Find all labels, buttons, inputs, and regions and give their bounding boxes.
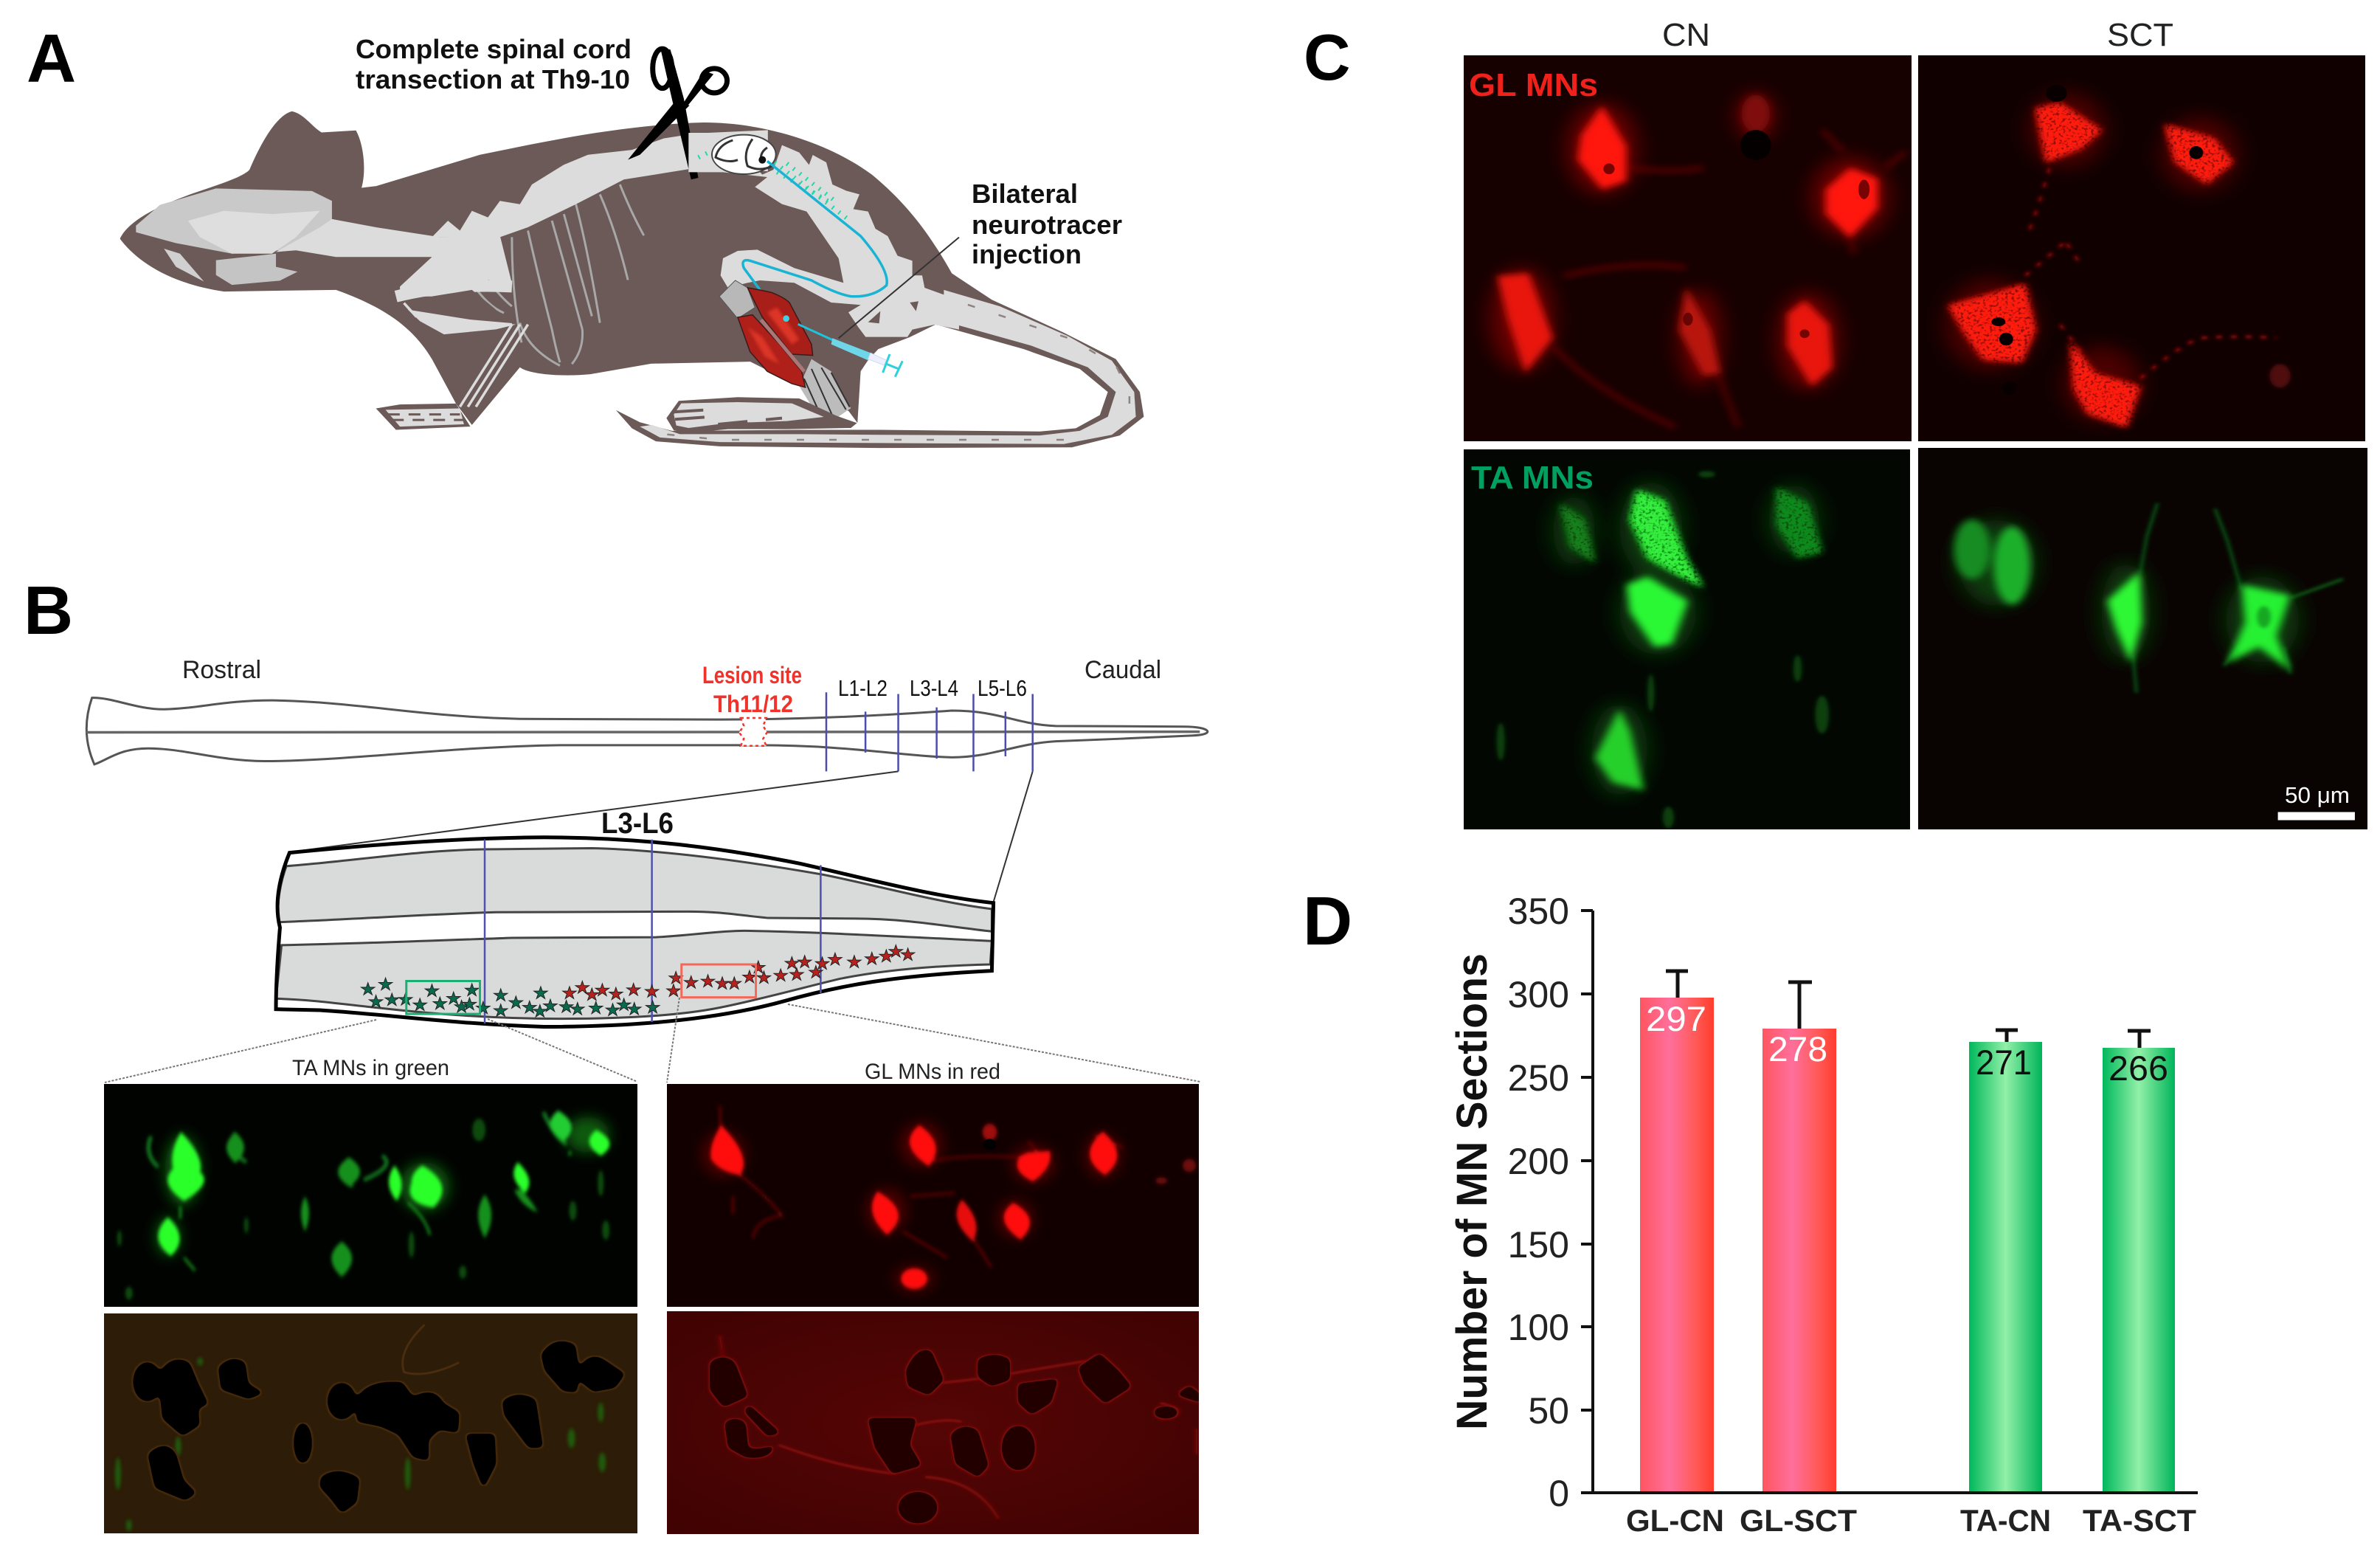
x axis labels: GL-CN bbox=[1626, 1503, 1724, 1538]
y tick labels: 150 bbox=[1508, 1224, 1569, 1265]
label GL MNs: GL MNs bbox=[1469, 67, 1598, 103]
bar GL-SCT bbox=[1762, 982, 1836, 1493]
TA heading: TA MNs in green bbox=[292, 1056, 449, 1080]
tail bbox=[616, 274, 1144, 448]
foreleg bbox=[404, 303, 528, 407]
x axis labels: GL-SCT bbox=[1740, 1503, 1857, 1538]
lesion label bbox=[702, 662, 802, 717]
y tick labels bbox=[1508, 891, 1569, 1514]
TA motor neuron stars bbox=[362, 978, 660, 1017]
scissor blades bbox=[628, 49, 713, 179]
lesion label: Th11/12 bbox=[713, 691, 793, 717]
segment labels: L1-L2 bbox=[838, 675, 888, 701]
zoom connector lines bbox=[288, 771, 1033, 902]
y tick labels: 200 bbox=[1508, 1141, 1569, 1182]
micrograph: TA MNs green channel bbox=[104, 1084, 637, 1307]
green region box bbox=[407, 981, 480, 1014]
bilateral injection leader bbox=[839, 238, 959, 338]
y tick labels: 100 bbox=[1508, 1307, 1569, 1348]
nerve bbox=[743, 161, 887, 315]
x axis labels bbox=[1626, 1503, 2196, 1538]
segment lines bbox=[485, 840, 820, 1023]
segment labels: L5-L6 bbox=[978, 675, 1027, 701]
bar GL-CN bbox=[1640, 971, 1714, 1493]
micrograph: GL MNs red channel bbox=[667, 1084, 1199, 1307]
hind foot bbox=[666, 397, 857, 433]
scale bar label: 50 μm bbox=[2285, 782, 2350, 808]
injection label: injection bbox=[972, 239, 1082, 269]
caudal label: Caudal bbox=[1085, 656, 1161, 684]
y tick labels: 300 bbox=[1508, 974, 1569, 1015]
segment lines bbox=[826, 692, 1033, 771]
panel B: spinal cord schematics bbox=[86, 656, 1208, 1534]
transection label: Complete spinal cord bbox=[356, 34, 632, 64]
panel label A: A bbox=[27, 20, 76, 97]
panel label C: C bbox=[1304, 21, 1351, 94]
lesion site bbox=[739, 718, 767, 746]
lower gray matter bbox=[276, 930, 992, 1019]
upper gray matter bbox=[278, 849, 992, 931]
spine bbox=[432, 130, 768, 237]
bar TA-SCT bbox=[2103, 1031, 2175, 1493]
GL heading: GL MNs in red bbox=[865, 1060, 1000, 1084]
axes and ticks bbox=[1581, 911, 2198, 1493]
micrograph: GL CN bbox=[1464, 55, 1912, 441]
micrograph: GL SCT bbox=[1918, 55, 2365, 441]
scissor handles bbox=[653, 49, 672, 89]
bar TA-CN bbox=[1969, 1030, 2042, 1493]
panel A: rat schematic bbox=[120, 34, 1144, 448]
rat body and skeleton bbox=[120, 49, 1144, 448]
y tick labels: 250 bbox=[1508, 1057, 1569, 1099]
skull bbox=[136, 188, 332, 254]
panel label D: D bbox=[1303, 883, 1352, 959]
y axis title: Number of MN Sections bbox=[1448, 953, 1496, 1430]
transection label: transection at Th9-10 bbox=[356, 64, 630, 94]
injection label: neurotracer bbox=[972, 210, 1122, 240]
x axis labels: TA-CN bbox=[1960, 1503, 2051, 1538]
L3-L6 heading: L3-L6 bbox=[601, 807, 674, 840]
tendons bbox=[799, 359, 851, 418]
rat body silhouette bbox=[120, 111, 992, 425]
cord outline fill bbox=[276, 838, 994, 1027]
segment labels bbox=[838, 675, 1027, 701]
label TA MNs: TA MNs bbox=[1471, 460, 1594, 496]
hind limb, nerve and injection bbox=[666, 133, 959, 433]
jaw bbox=[216, 254, 297, 285]
syringe bbox=[798, 324, 902, 377]
y tick labels: 0 bbox=[1549, 1473, 1569, 1514]
segment labels: L3-L4 bbox=[910, 675, 958, 701]
tail vertebrae bbox=[640, 290, 1136, 444]
muscle bbox=[738, 288, 813, 387]
scissors bbox=[628, 49, 713, 179]
column label SCT: SCT bbox=[2107, 17, 2173, 53]
column label CN: CN bbox=[1662, 17, 1710, 53]
micrograph: TA MNs ghost cells bbox=[104, 1313, 637, 1533]
red region box bbox=[682, 964, 756, 998]
bar TA-SCT: 266 bbox=[2109, 1049, 2168, 1088]
cord border bbox=[276, 838, 994, 1027]
injection label bbox=[972, 179, 1122, 269]
full spinal cord outline bbox=[86, 692, 1208, 902]
micrograph: GL MNs ghost cells bbox=[667, 1311, 1199, 1534]
micrograph: TA CN bbox=[1464, 449, 1910, 829]
y tick labels: 50 bbox=[1528, 1390, 1569, 1432]
transection label bbox=[356, 34, 632, 94]
y tick labels: 350 bbox=[1508, 891, 1569, 932]
micrograph: TA SCT bbox=[1918, 448, 2367, 829]
enlarged L3-L6 segment bbox=[276, 838, 994, 1027]
lesion label: Lesion site bbox=[702, 662, 802, 688]
rostral label: Rostral bbox=[182, 656, 261, 684]
panel C: micrograph grid bbox=[1464, 17, 2367, 829]
dotted zoom lines bbox=[105, 998, 1200, 1082]
x axis labels: TA-SCT bbox=[2083, 1503, 2196, 1538]
panel label B: B bbox=[24, 572, 73, 649]
panel D: bar chart bbox=[1448, 891, 2198, 1538]
ribs bbox=[472, 184, 644, 366]
injection label: Bilateral bbox=[972, 179, 1078, 209]
traced motor neuron dots bbox=[699, 151, 851, 221]
gray knee patch bbox=[719, 280, 755, 319]
lumbar spine and femur bbox=[688, 133, 959, 337]
scale bar bbox=[2278, 812, 2355, 821]
spinal cord cross-section bbox=[712, 135, 776, 174]
bar GL-SCT: 278 bbox=[1768, 1029, 1827, 1068]
neck and shoulder bbox=[276, 219, 512, 297]
bar GL-CN: 297 bbox=[1646, 999, 1706, 1038]
bar TA-CN: 271 bbox=[1976, 1043, 2032, 1082]
GL motor neuron stars bbox=[563, 945, 915, 1001]
front paw bbox=[376, 404, 471, 430]
